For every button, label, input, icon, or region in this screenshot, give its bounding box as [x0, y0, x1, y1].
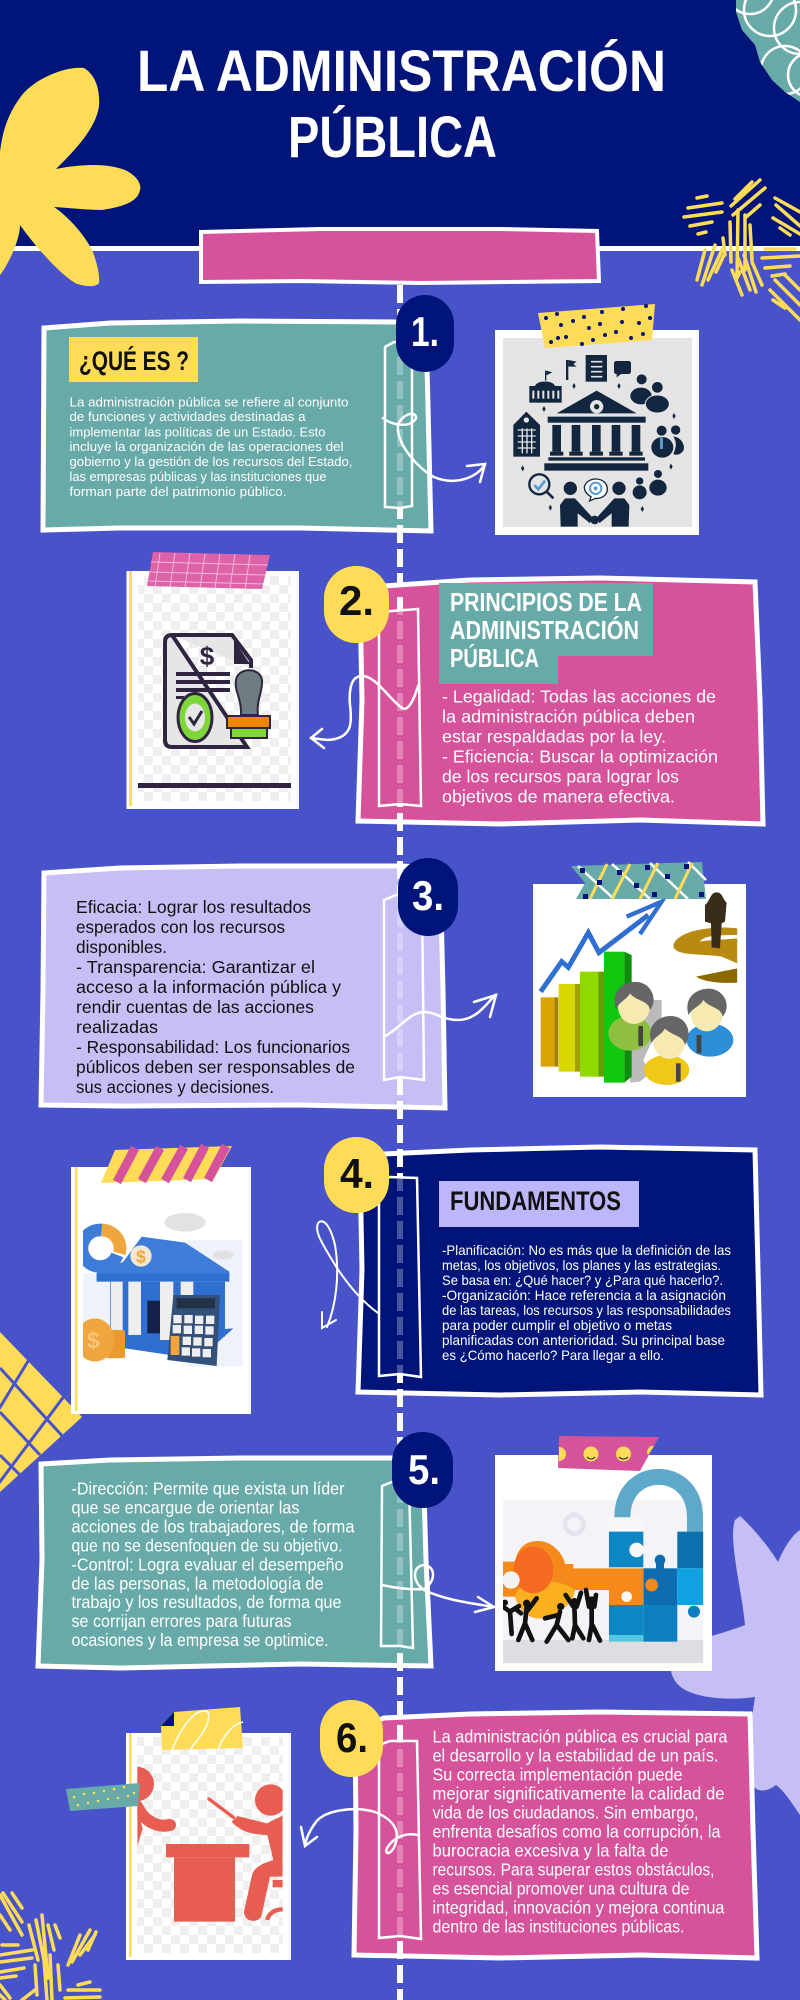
arrow 5 — [382, 1565, 494, 1612]
tape 1 — [385, 342, 412, 508]
number 6: 6. — [336, 1714, 368, 1761]
text: definition: La administración pública se refiere al conjunto — [70, 394, 348, 409]
text: conclusion: enfrenta desafíos como la corrupción, la — [432, 1822, 721, 1842]
tape: pink grid — [147, 552, 270, 589]
image 1: government icons — [495, 330, 699, 535]
heading: principios: ADMINISTRACIÓN — [450, 615, 639, 645]
tape 5 — [381, 1482, 413, 1648]
center dashed line — [397, 285, 403, 2000]
text: definition: incluye la organización de las operaciones del — [70, 439, 344, 454]
panel 4: fundamentos — [358, 1147, 761, 1395]
arrow 6 — [301, 1809, 418, 1853]
title: PÚBLICA — [288, 105, 497, 170]
tape: teal plaid — [571, 862, 706, 899]
image 3: growth chart with people — [533, 884, 746, 1097]
title: LA ADMINISTRACIÓN — [137, 39, 666, 104]
tape: teal dots — [66, 1783, 140, 1811]
decoration: lavender flower — [671, 1516, 800, 1815]
image 2: document with stamp — [126, 571, 299, 809]
text: planificacion organizacion: Se basa en: ¿Qué hacer? y ¿Para qué hacerlo?. — [442, 1272, 723, 1288]
title — [137, 39, 666, 170]
text: eficacia transparencia responsabilidad: rendir cuentas de las acciones — [76, 997, 314, 1017]
arrow 1 — [383, 414, 485, 482]
text: eficacia transparencia responsabilidad: esperados con los recursos — [76, 917, 285, 937]
text: planificacion organizacion: planificadas con anterioridad. Su principal base — [442, 1332, 725, 1348]
number 4 — [324, 1137, 389, 1213]
text: legalidad eficiencia: - Eficiencia: Buscar la optimización — [442, 746, 718, 766]
text: definition: forman parte del patrimonio público. — [70, 484, 286, 499]
text: eficacia transparencia responsabilidad: - Transparencia: Garantizar el — [76, 957, 315, 977]
text: definition: gobierno y la gestión de los recursos del Estado, — [70, 454, 352, 469]
text: conclusion: La administración pública es crucial para — [432, 1727, 728, 1747]
panel 3: eficacia — [41, 861, 445, 1108]
text: conclusion: recursos. Para superar estos obstáculos, — [432, 1860, 714, 1880]
text: direccion control: que se encargue de orientar las — [72, 1498, 300, 1518]
image 4: bank with calculator — [71, 1167, 251, 1414]
text: eficacia transparencia responsabilidad: disponibles. — [76, 937, 167, 957]
decoration: teal scale blob — [736, 0, 800, 102]
text: direccion control: -Control: Logra evaluar el desempeño — [72, 1554, 344, 1574]
text: legalidad eficiencia: - Legalidad: Todas las acciones de — [442, 686, 716, 706]
heading: principios: PRINCIPIOS DE LA — [450, 587, 642, 617]
text: conclusion: Su correcta implementación puede — [432, 1765, 682, 1785]
text: direccion control: se corrijan errores para futuras — [72, 1611, 292, 1631]
text: direccion control: ocasiones y la empresa se optimice. — [72, 1630, 328, 1650]
number 5 — [392, 1432, 453, 1508]
text: planificacion organizacion: para poder cumplir el objetivo o metas — [442, 1317, 672, 1333]
text: eficacia transparencia responsabilidad: acceso a la información pública y — [76, 977, 341, 997]
number 2 — [324, 566, 389, 643]
number 3 — [398, 858, 458, 936]
image 4: bank with calculator: $ — [136, 1247, 146, 1267]
arrow 3 — [385, 995, 496, 1036]
text: legalidad eficiencia: objetivos de manera efectiva. — [442, 786, 675, 806]
decoration: yellow stripes top right — [684, 180, 800, 320]
tape: polka dots — [538, 304, 655, 348]
text: conclusion: burocracia excesiva y la falta de — [432, 1841, 668, 1861]
text: direccion control: de las personas, la metodología de — [72, 1574, 324, 1594]
number 6 — [320, 1700, 383, 1777]
number 1: 1. — [411, 308, 439, 355]
text: legalidad eficiencia — [442, 686, 718, 806]
number 5: 5. — [408, 1446, 440, 1493]
header band — [0, 0, 800, 248]
text: planificacion organizacion: -Organización: Hace referencia a la asignación — [442, 1287, 726, 1303]
heading: fundamentos — [439, 1181, 639, 1227]
text: definition: de funciones y actividades destinadas a — [70, 409, 306, 424]
text: conclusion: integridad, innovación y mejora continua — [432, 1898, 725, 1918]
heading: qué es: ¿QUÉ ES ? — [79, 345, 189, 376]
heading: qué es — [69, 337, 198, 382]
text: eficacia transparencia responsabilidad: Eficacia: Lograr los resultados — [76, 897, 311, 917]
tape: pink yellow stripes — [101, 1146, 232, 1183]
tape: pink smileys — [558, 1436, 659, 1471]
text: eficacia transparencia responsabilidad — [76, 897, 355, 1097]
text: conclusion: es esencial promover una cultura de — [432, 1879, 690, 1899]
text: planificacion organizacion: de las tareas, los recursos y las responsabilidades — [442, 1302, 731, 1318]
number 1 — [396, 295, 454, 372]
decoration: yellow grid left — [0, 1332, 82, 1495]
image 4: bank with calculator: $ — [87, 1327, 100, 1353]
tape 2 — [379, 609, 421, 806]
text: planificacion organizacion: metas, los objetivos, los planes y las estrategias. — [442, 1257, 721, 1273]
text: eficacia transparencia responsabilidad: - Responsabilidad: Los funcionarios — [76, 1037, 350, 1057]
tape 4 — [379, 1177, 421, 1377]
panel 5: direccion control — [38, 1458, 431, 1668]
decoration: yellow flower — [0, 68, 140, 286]
panel 6: conclusion — [354, 1712, 757, 1958]
text: planificacion organizacion — [442, 1242, 731, 1363]
heading: principios — [439, 583, 653, 684]
text: legalidad eficiencia: de los recursos para lograr los — [442, 766, 679, 786]
tape 3 — [384, 895, 424, 1080]
text: conclusion: mejorar significativamente la calidad de — [432, 1784, 724, 1804]
text: conclusion — [432, 1727, 728, 1937]
text: eficacia transparencia responsabilidad: públicos deben ser responsables de — [76, 1057, 355, 1077]
heading: principios: PÚBLICA — [450, 643, 539, 673]
text: direccion control: trabajo y los resultados, de forma que — [72, 1592, 342, 1612]
text: definition: implementar las políticas de un Estado. Esto — [70, 424, 326, 439]
arrow 4 — [317, 1221, 378, 1328]
tape 6 — [379, 1741, 421, 1939]
panel 2: principios — [358, 578, 763, 824]
text: legalidad eficiencia: la administración pública deben — [442, 706, 695, 726]
arrow 2 — [311, 676, 418, 748]
text: conclusion: vida de los ciudadanos. Sin embargo, — [432, 1803, 698, 1823]
text: conclusion: el desarrollo y la estabilidad de un país. — [432, 1746, 718, 1766]
pink banner — [201, 229, 599, 283]
number 3: 3. — [412, 872, 444, 919]
text: direccion control: que no se desenfoquen de su objetivo. — [72, 1536, 342, 1556]
text: definition: las empresas públicas y las instituciones que — [70, 469, 326, 484]
image 6: teacher at lectern — [119, 1733, 291, 1960]
text: legalidad eficiencia: estar respaldadas por la ley. — [442, 726, 666, 746]
decoration: yellow stripes bottom left — [0, 1893, 100, 2000]
number 2: 2. — [339, 577, 374, 624]
text: planificacion organizacion: -Planificación: No es más que la definición de las — [442, 1242, 731, 1258]
text: direccion control — [72, 1478, 355, 1650]
text: eficacia transparencia responsabilidad: realizadas — [76, 1017, 158, 1037]
text: planificacion organizacion: es ¿Cómo hacerlo? Para llegar a ello. — [442, 1347, 664, 1363]
tape: yellow swirl — [161, 1707, 243, 1750]
image 5: key, lock and puzzle — [495, 1455, 712, 1671]
image 2: document with stamp: $ — [200, 641, 215, 671]
heading: fundamentos: FUNDAMENTOS — [450, 1186, 621, 1216]
panel 1: qué es — [43, 321, 431, 533]
text: direccion control: acciones de los trabajadores, de forma — [72, 1516, 355, 1536]
text: definition — [70, 394, 352, 499]
text: direccion control: -Dirección: Permite que exista un líder — [72, 1478, 345, 1498]
text: eficacia transparencia responsabilidad: sus acciones y decisiones. — [76, 1077, 274, 1097]
text: conclusion: dentro de las instituciones públicas. — [432, 1917, 684, 1937]
number 4: 4. — [340, 1150, 374, 1197]
